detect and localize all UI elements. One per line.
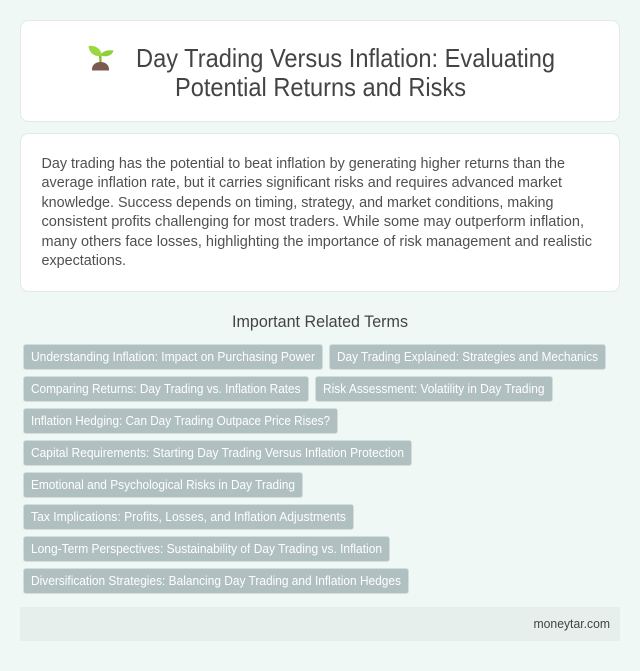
tag: diversification strategies: Diversification Strategies: Balancing Day Trading and Inflation Hedges bbox=[31, 574, 401, 588]
tag: long-term perspectives: Long-Term Perspectives: Sustainability of Day Trading vs. Inflation bbox=[31, 542, 382, 556]
tag: capital requirements: Capital Requirements: Starting Day Trading Versus Inflation Protection bbox=[31, 446, 404, 460]
title: Potential Returns and Risks bbox=[175, 72, 466, 102]
text block: summary bbox=[42, 156, 592, 269]
tag: inflation hedging: Inflation Hedging: Can Day Trading Outpace Price Rises? bbox=[31, 414, 330, 428]
tag: understanding inflation: Understanding Inflation: Impact on Purchasing Power bbox=[31, 350, 315, 364]
footer: moneytar.com bbox=[534, 617, 610, 631]
panel: title card bbox=[20, 20, 620, 122]
tag: tax implications: Tax Implications: Profits, Losses, and Inflation Adjustments bbox=[31, 510, 346, 524]
tag: risk assessment bbox=[316, 376, 552, 402]
title bbox=[136, 43, 555, 102]
heading: important related terms: Important Related Terms bbox=[232, 312, 408, 331]
text block: summary: consistent profits challenging for most traders. While some may outperform inflation, bbox=[42, 214, 584, 230]
text block: summary: expectations. bbox=[42, 253, 126, 269]
icon: seedling bbox=[88, 46, 114, 70]
tag: comparing returns: Comparing Returns: Day Trading vs. Inflation Rates bbox=[31, 382, 300, 396]
tag: risk assessment: Risk Assessment: Volatility in Day Trading bbox=[323, 382, 544, 396]
tag: understanding inflation bbox=[24, 344, 322, 370]
footer bbox=[20, 607, 620, 641]
text block: summary: many others face losses, highlighting the importance of risk management and realistic bbox=[42, 234, 592, 250]
tag: inflation hedging bbox=[24, 408, 338, 434]
tag list bbox=[24, 344, 606, 594]
panel: summary paragraph bbox=[20, 134, 620, 292]
tag: long-term perspectives bbox=[24, 536, 390, 562]
text block: summary: Day trading has the potential to beat inflation by generating higher returns than the bbox=[42, 156, 565, 172]
tag: day trading explained: Day Trading Explained: Strategies and Mechanics bbox=[337, 350, 598, 364]
text block: summary: average inflation rate, but it carries significant risks and requires advanced market bbox=[42, 175, 562, 191]
tag: comparing returns bbox=[24, 376, 308, 402]
tag: emotional risks bbox=[24, 472, 302, 498]
tag: diversification strategies bbox=[24, 568, 408, 594]
tag: tax implications bbox=[24, 504, 354, 530]
title: Day Trading Versus Inflation: Evaluating bbox=[136, 43, 555, 73]
tag: emotional risks: Emotional and Psychological Risks in Day Trading bbox=[31, 478, 295, 492]
tag: day trading explained bbox=[330, 344, 606, 370]
tag: capital requirements bbox=[24, 440, 412, 466]
text block: summary: knowledge. Success depends on timing, strategy, and market conditions, making bbox=[42, 195, 554, 211]
